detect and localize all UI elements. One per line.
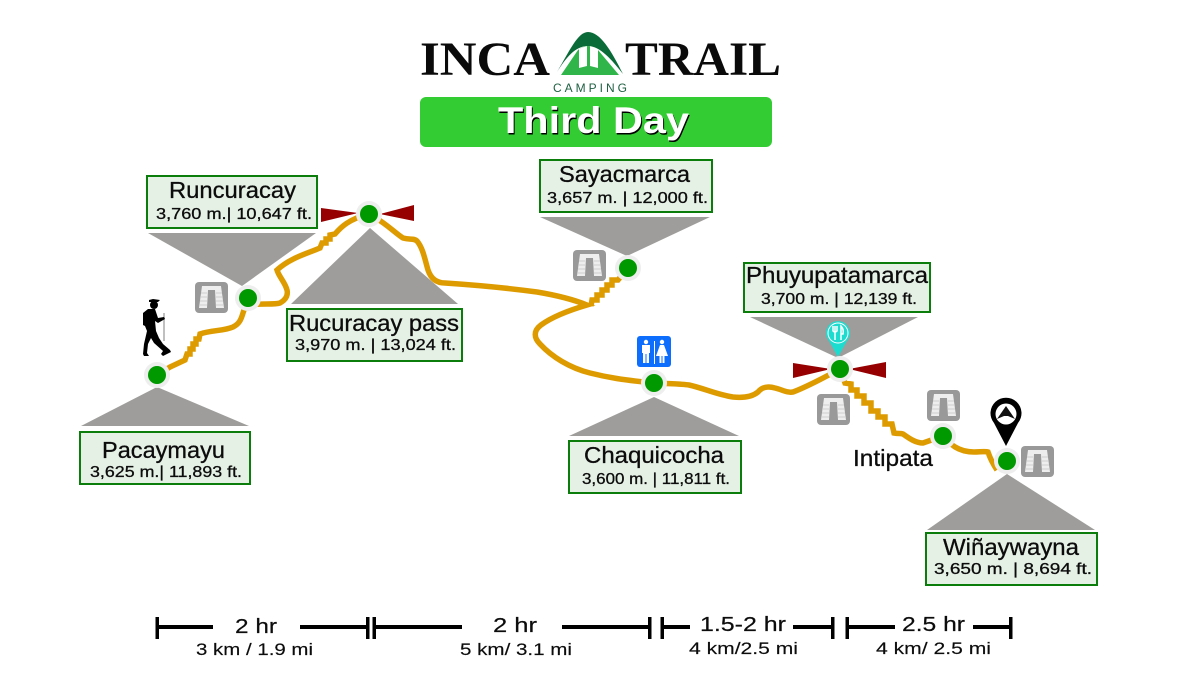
- label: Phuyupatamarca: 3,700 m. | 12,139 ft.: [761, 291, 917, 308]
- mountain: Wiñaywayna: [927, 474, 1095, 530]
- title banner: [420, 97, 772, 147]
- logo subtitle: CAMPING: [553, 81, 627, 95]
- marker: Chaquicocha: [569, 336, 741, 493]
- node: Runcuracay: [235, 285, 261, 311]
- marker: Rucuracay pass: [287, 201, 462, 361]
- label: Pacaymayu: [80, 432, 250, 484]
- label: Phuyupatamarca: [744, 262, 930, 312]
- segment: Phuyupatamarca to Wiñaywayna: 4 km/ 2.5 mi: [876, 640, 991, 658]
- node: Wiñaywayna: [994, 448, 1020, 474]
- mountain: Phuyupatamarca: [750, 317, 918, 358]
- label: Runcuracay: Runcuracay: [169, 177, 297, 203]
- segment: Runcuracay to Chaquicocha: [372, 615, 652, 659]
- label: Runcuracay: [147, 176, 317, 228]
- label: Chaquicocha: Chaquicocha: [584, 442, 724, 468]
- marker: Pacaymayu: [80, 362, 250, 484]
- logo: [420, 32, 781, 95]
- icon: ruins gate: [195, 282, 228, 313]
- marker: Wiñaywayna: [926, 398, 1097, 585]
- icon: ruins gate: [927, 390, 960, 421]
- node: Rucuracay pass: [356, 201, 382, 227]
- title: Third Day: [498, 100, 689, 141]
- title shadow: Third Day: [499, 102, 690, 142]
- segment: Chaquicocha to Phuyupatamarca: [660, 614, 834, 658]
- label: Rucuracay pass: [287, 309, 462, 361]
- node: Intipata: [930, 423, 956, 449]
- node: Pacaymayu: [144, 362, 170, 388]
- logo tent icon: [557, 32, 623, 75]
- label: Phuyupatamarca: Phuyupatamarca: [746, 262, 928, 288]
- label: Chaquicocha: 3,600 m. | 11,811 ft.: [582, 471, 730, 488]
- logo wordmark TRAIL: TRAIL: [625, 33, 781, 86]
- node: Sayacmarca: [615, 255, 641, 281]
- mountain: Rucuracay pass: [291, 228, 458, 304]
- icon: pass marker: [793, 362, 886, 378]
- mountain: Runcuracay: [148, 233, 316, 286]
- label: Sayacmarca: 3,657 m. | 12,000 ft.: [547, 190, 708, 207]
- label: Rucuracay pass: Rucuracay pass: [289, 310, 459, 336]
- elevation trail route: [157, 214, 997, 470]
- label: Pacaymayu: 3,625 m.| 11,893 ft.: [90, 464, 242, 481]
- segment: Pacaymayu to Runcuracay: [156, 616, 370, 659]
- segment: Chaquicocha to Phuyupatamarca: 4 km/2.5 mi: [689, 640, 798, 658]
- marker: Intipata: [853, 390, 960, 471]
- icon: ruins gate: [573, 250, 606, 281]
- mountain: Chaquicocha: [569, 397, 739, 436]
- marker: Runcuracay: [147, 176, 317, 313]
- node: Chaquicocha: [641, 370, 667, 396]
- marker: Phuyupatamarca: [744, 262, 930, 425]
- label: Intipata: Intipata: [853, 445, 933, 471]
- label: Chaquicocha: [569, 441, 741, 493]
- segment: Pacaymayu to Runcuracay: 2 hr: [235, 616, 277, 638]
- mountain: Sayacmarca: [540, 217, 710, 256]
- icon: ruins gate: [1021, 446, 1054, 477]
- stepped section: Sayacmarca descent: [591, 268, 628, 306]
- icon: restaurant pin: [826, 321, 850, 357]
- marker: Sayacmarca: [540, 160, 712, 281]
- segment: Pacaymayu to Runcuracay: 3 km / 1.9 mi: [196, 641, 313, 659]
- segment: Runcuracay to Chaquicocha: 2 hr: [493, 615, 537, 637]
- segment: Phuyupatamarca to Wiñaywayna: [846, 614, 1012, 658]
- mountain: Pacaymayu: [81, 387, 249, 426]
- icon: ruins gate: [817, 394, 850, 425]
- label: Pacaymayu: Pacaymayu: [102, 437, 225, 463]
- icon: campsite pin: [990, 398, 1022, 446]
- icon: pass marker: [321, 205, 414, 222]
- logo wordmark INCA: INCA: [420, 33, 550, 86]
- label: Sayacmarca: [540, 160, 712, 212]
- label: Wiñaywayna: 3,650 m. | 8,694 ft.: [934, 561, 1092, 578]
- duration scale: [156, 614, 1012, 659]
- segment: Phuyupatamarca to Wiñaywayna: 2.5 hr: [902, 614, 965, 636]
- label: Wiñaywayna: [926, 533, 1097, 585]
- node: Phuyupatamarca: [827, 356, 853, 382]
- label: Rucuracay pass: 3,970 m. | 13,024 ft.: [295, 337, 456, 354]
- stepped section: Phuyupatamarca descent: [840, 369, 943, 443]
- label: Sayacmarca: Sayacmarca: [559, 161, 690, 187]
- icon: hiker: [143, 299, 171, 356]
- segment: Runcuracay to Chaquicocha: 5 km/ 3.1 mi: [460, 641, 572, 659]
- label: Runcuracay: 3,760 m.| 10,647 ft.: [156, 206, 312, 223]
- segment: Chaquicocha to Phuyupatamarca: 1.5-2 hr: [700, 614, 786, 636]
- icon: restrooms: [637, 336, 671, 367]
- label: Wiñaywayna: Wiñaywayna: [943, 534, 1079, 560]
